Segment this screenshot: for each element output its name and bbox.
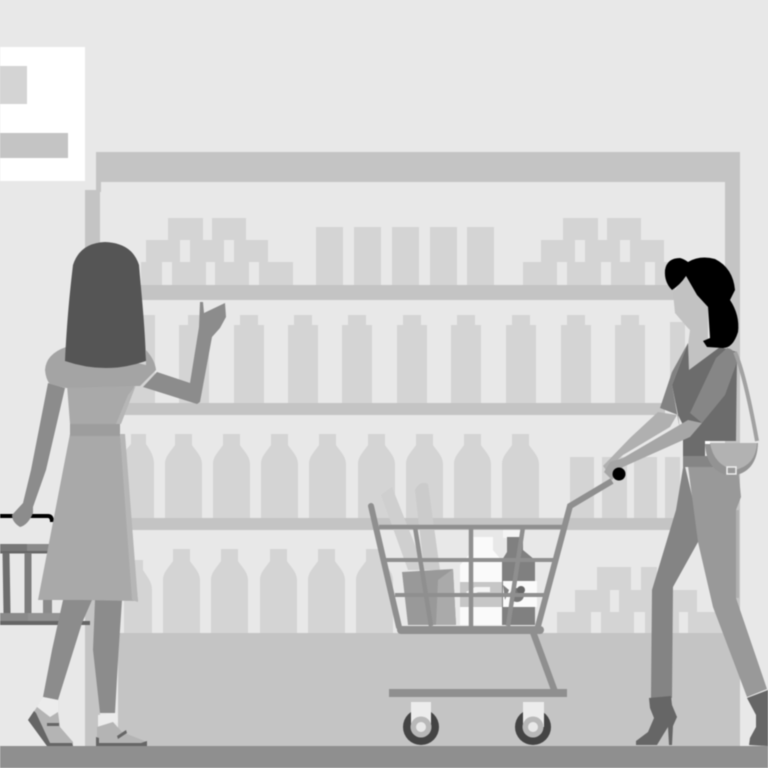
groceries <box>381 483 537 625</box>
hair <box>665 258 738 348</box>
belt <box>683 456 713 467</box>
shopping cart <box>371 481 612 745</box>
sign <box>0 47 85 181</box>
back leg <box>43 600 92 700</box>
boot left <box>636 696 677 745</box>
products: top shelf <box>141 218 670 285</box>
left shoe <box>28 697 73 746</box>
shopper right: woman with cart <box>603 258 768 746</box>
shopping basket <box>0 516 90 625</box>
cart frame <box>371 481 612 692</box>
hair <box>65 242 146 368</box>
raised right arm <box>143 302 226 404</box>
milk carton <box>460 537 503 625</box>
right wheel <box>515 702 551 745</box>
front leg <box>688 466 767 697</box>
cart base <box>389 689 567 697</box>
waist belt <box>70 424 120 436</box>
products: bottom shelf bottles and boxes <box>124 549 725 633</box>
products: third shelf bottles and boxes <box>124 434 680 518</box>
shelving unit <box>85 152 740 746</box>
dress skirt <box>38 434 138 601</box>
products: second shelf bottles <box>125 315 685 403</box>
left sleeve <box>660 343 688 430</box>
right shoe <box>96 713 147 746</box>
paper bag <box>402 569 456 625</box>
torso <box>672 343 737 457</box>
right sleeve <box>690 348 737 423</box>
front leg <box>93 600 122 713</box>
dark bottle <box>503 530 523 538</box>
far arm <box>603 412 677 470</box>
left arm <box>12 383 65 527</box>
dress bodice <box>67 385 135 424</box>
shopper left: woman from behind <box>12 242 226 746</box>
floor <box>0 746 768 768</box>
neck and face <box>673 275 722 372</box>
hand knob <box>612 468 626 480</box>
left wheel <box>403 702 439 745</box>
near arm <box>604 420 702 480</box>
handbag <box>705 352 758 476</box>
puffed sleeves <box>45 347 156 388</box>
baguette right <box>415 483 440 570</box>
back leg <box>651 462 700 698</box>
boot right <box>747 690 768 746</box>
baguette left <box>381 487 425 570</box>
